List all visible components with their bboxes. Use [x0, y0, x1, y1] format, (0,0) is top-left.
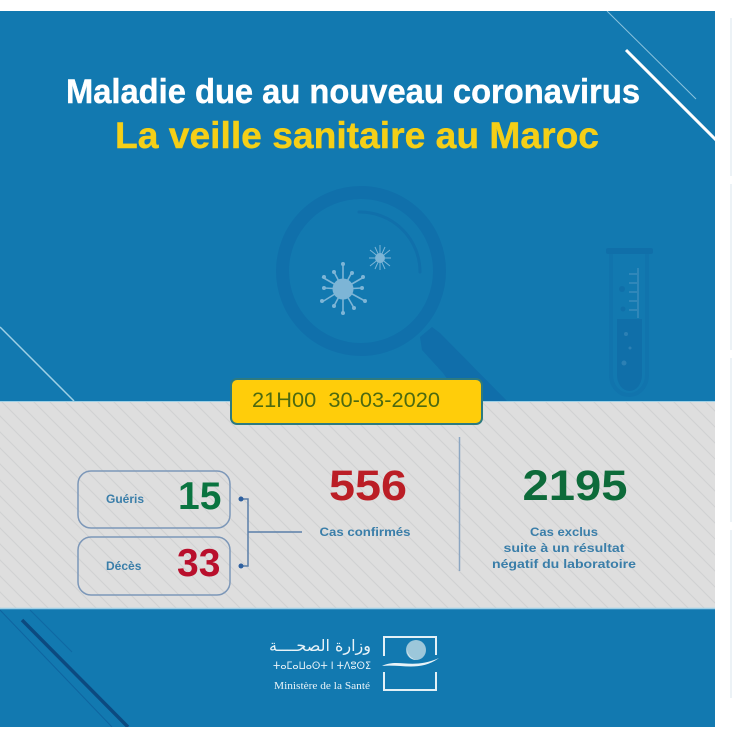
stat: confirmed cases: 556: [329, 462, 407, 510]
decorative corner line: left: [0, 327, 74, 401]
stat: confirmed cases: Cas confirmés: [320, 525, 411, 539]
date badge: [231, 379, 482, 424]
divider: [458, 437, 460, 571]
icon: test tube: [606, 248, 653, 395]
ministry name in Arabic: وزارة الصحــــة: [269, 636, 371, 656]
bracket connector: [238, 496, 302, 568]
stat: excluded cases: suite à un résultat: [504, 541, 624, 555]
box: Guéris: 15: [178, 475, 221, 518]
icon: small virus: [369, 245, 391, 270]
ministry name in French: Ministère de la Santé: [274, 681, 370, 692]
subtitle: La veille sanitaire au Maroc: [115, 115, 599, 156]
page edge marks: [730, 18, 732, 698]
box: Guéris: Guéris: [106, 492, 144, 506]
stat: excluded cases: [492, 462, 636, 571]
logo: ministry of health: [269, 636, 439, 692]
stat: excluded cases: 2195: [522, 462, 628, 510]
box: Décès: Décès: [106, 559, 142, 573]
stat: confirmed cases: [320, 462, 411, 539]
decorative corner lines: bottom left: [0, 610, 128, 727]
stat: excluded cases: Cas exclus: [530, 525, 598, 539]
title: Maladie due au nouveau coronavirus: [66, 73, 640, 111]
box: Décès: 33: [177, 542, 220, 585]
ministry name in Tifinagh: ⵜⴰⵎⴰⵡⴰⵙⵜ ⵏ ⵜⴷⵓⵙⵉ: [273, 661, 371, 672]
box: Guéris: [78, 471, 230, 528]
icon: large virus: [320, 262, 367, 315]
date badge: 21H00 30-03-2020: [252, 389, 440, 412]
box: Décès: [78, 537, 230, 595]
panel: grey statistics band: [0, 401, 715, 609]
stat: excluded cases: négatif du laboratoire: [492, 557, 636, 571]
decorative corner lines: top right: [607, 11, 716, 140]
logo emblem: [382, 637, 439, 690]
icon: magnifying glass with viruses: [282, 192, 507, 401]
